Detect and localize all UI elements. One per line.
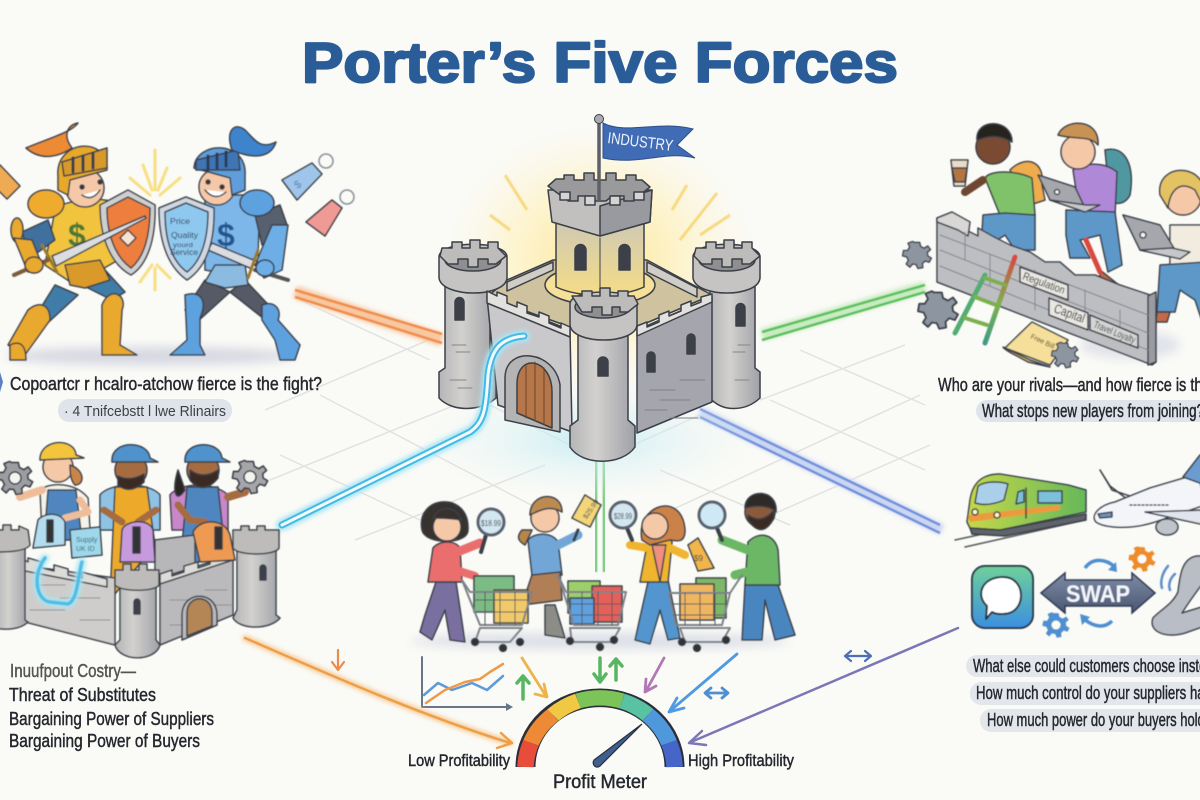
blue knight sword and shield xyxy=(159,197,288,280)
double blue arrow top right xyxy=(845,651,871,661)
shopping cart 2 xyxy=(558,575,626,650)
castle: rear wall and courtyard xyxy=(487,260,712,340)
icon: yellow tag xyxy=(688,538,714,571)
industry flag: INDUSTRY xyxy=(607,130,674,155)
icon: swap arrow: SWAP xyxy=(1066,581,1130,608)
central castle: industry xyxy=(282,114,760,525)
scroll: Free Bill xyxy=(1029,333,1056,351)
icon: magnifier xyxy=(478,509,504,552)
long purple arrow xyxy=(689,628,958,745)
buyer with yellow jacket xyxy=(610,502,714,644)
rivalry caption: Copoartcr r hcalro-atchow fierce is the fight? xyxy=(10,373,322,394)
scroll xyxy=(1003,322,1068,367)
new entrants captions xyxy=(938,374,1200,422)
glowing connector pipe xyxy=(37,558,82,604)
force beam: rivalry to castle xyxy=(295,290,442,343)
icon: price tag blue xyxy=(282,154,333,200)
supplier machines xyxy=(33,514,235,562)
worker with yellow cap xyxy=(20,443,90,540)
substitutes suppliers and buyers questions xyxy=(966,655,1200,732)
force beam: substitutes to castle xyxy=(700,409,942,533)
gold knight shield and sword xyxy=(14,190,155,275)
profit meter gauge xyxy=(526,698,674,767)
panel: buyers comparing prices with carts xyxy=(410,493,795,652)
glowing pipe entering castle xyxy=(282,336,524,525)
icon: circular arrows and gears xyxy=(1042,546,1156,638)
icon: yellow tag: $9 xyxy=(694,554,703,563)
panel: suppliers castle with workers xyxy=(0,443,280,658)
barrier wall xyxy=(937,212,1156,365)
icon: swap arrow xyxy=(1041,573,1155,613)
wall sign: Capital: Capital xyxy=(1052,301,1087,326)
yellow arrow xyxy=(522,658,547,697)
buyer with green sweater xyxy=(699,493,795,640)
rivalry caption: · 4 Tnifcebstt l lwe Rlinairs xyxy=(64,403,226,420)
worker with purple shirt xyxy=(170,445,245,570)
person with green shirt and coffee xyxy=(951,124,1045,277)
buyer with blue shirt and apron xyxy=(519,495,601,638)
panel: substitutes train plane chat and phone xyxy=(955,455,1200,638)
castle: right tower xyxy=(693,240,760,408)
castle: left wall with gate xyxy=(487,291,572,432)
icon: laptop xyxy=(1123,215,1190,259)
icon: magnifier: $18.99 xyxy=(481,519,501,528)
forces list: Bargaining Power of Buyers xyxy=(9,730,200,751)
buyer with pink top xyxy=(420,502,504,642)
icon: price tag coral xyxy=(306,190,354,236)
gauge needle xyxy=(593,724,642,767)
wall sign: Brand Loyalty xyxy=(1090,315,1138,348)
green pair of arrows xyxy=(594,658,622,682)
airplane xyxy=(1094,455,1200,535)
forces list: Threat of Substitutes xyxy=(9,684,156,705)
forces list: Inuufpout Costry— xyxy=(10,660,136,681)
gold knight xyxy=(8,123,137,360)
panel: competitive rivalry knights xyxy=(0,123,354,365)
industry flag xyxy=(594,114,695,202)
blue knight xyxy=(170,127,300,360)
wall sign: Regulation: Regulation xyxy=(1021,271,1066,297)
worker with orange apron xyxy=(100,445,160,600)
supplier machines: Supply xyxy=(76,537,98,544)
castle back and walls xyxy=(20,535,233,645)
icon: price tag orange xyxy=(0,165,20,199)
castle: right wall xyxy=(637,294,712,433)
mini line chart xyxy=(422,657,513,711)
wall sign: Brand Loyalty: Travel Loyalty xyxy=(1092,320,1137,346)
person with purple shirt and laptop xyxy=(1038,123,1131,297)
castle: left tower xyxy=(439,240,507,408)
icon: chat app xyxy=(972,566,1033,628)
castle towers xyxy=(0,525,280,658)
purple arrow xyxy=(645,658,664,692)
title: Porter’s Five Forces xyxy=(302,31,898,95)
blue knight sword and shield: yourd xyxy=(173,242,193,249)
icon: price tag held up xyxy=(572,495,601,540)
high profitability label: High Profitability xyxy=(688,751,794,770)
icon: price tag held up: $25.99 xyxy=(582,499,600,521)
rivalry caption xyxy=(0,372,322,422)
wall sign: Capital xyxy=(1049,298,1088,330)
shopping cart 3 xyxy=(669,575,742,652)
train xyxy=(955,474,1086,547)
icon: laptop xyxy=(1038,175,1100,212)
shield text: Price xyxy=(170,216,190,226)
small orange down arrow xyxy=(332,650,344,670)
panel: new entrants climbing wall xyxy=(903,123,1200,368)
icon: gears held by workers xyxy=(0,460,268,494)
castle: central keep xyxy=(545,173,655,305)
castle: front tower xyxy=(570,288,638,461)
gold knight: $ xyxy=(68,217,86,253)
force beam: buyers to castle xyxy=(596,460,604,572)
icon: gate xyxy=(182,596,217,640)
shopping cart 1 xyxy=(462,576,532,652)
profit meter label: Profit Meter xyxy=(553,772,648,793)
small double arrow xyxy=(705,688,728,698)
forces list: Bargaining Power of Suppliers xyxy=(9,708,214,729)
blue knight sword and shield: Quality xyxy=(171,231,198,240)
blue knight sword and shield: Service xyxy=(170,248,199,257)
icon: magnifier xyxy=(610,502,636,540)
low profitability label: Low Profitability xyxy=(408,751,510,770)
blue arrow xyxy=(669,654,737,712)
long orange arrow xyxy=(245,638,512,748)
icon: telephone handset xyxy=(1152,556,1200,635)
ladder xyxy=(955,240,1100,343)
supplier machines: UK ID xyxy=(76,546,95,553)
force beam: new entrants to castle xyxy=(762,285,925,340)
green up arrow xyxy=(517,676,529,699)
icon: price tag blue: $ xyxy=(292,178,304,192)
icon: magnifier xyxy=(699,502,725,540)
icon: clash sparks xyxy=(130,150,180,290)
icon: magnifier: $28.99 xyxy=(614,512,632,521)
blue knight: $ xyxy=(217,217,235,253)
arrows converging on profit meter xyxy=(245,628,958,748)
forces list xyxy=(9,660,214,751)
icons: gears near the wall xyxy=(903,242,1079,368)
person with blonde hair and laptop xyxy=(1123,170,1200,330)
